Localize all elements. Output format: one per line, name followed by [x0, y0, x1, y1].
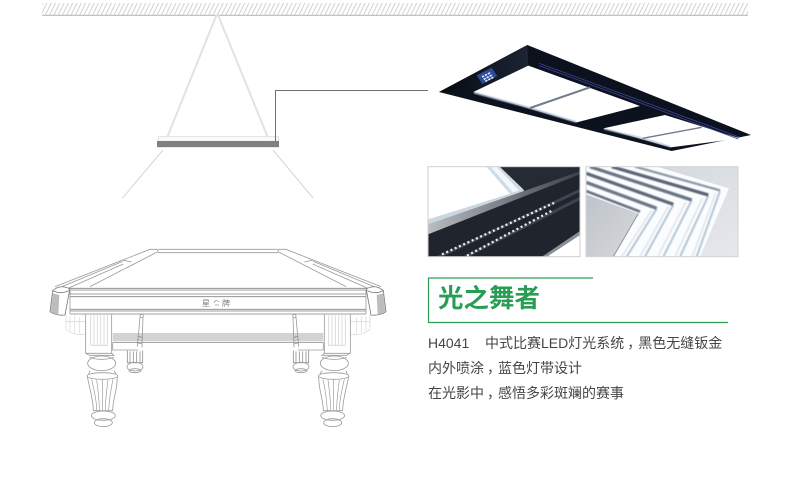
lamp window: right panel: [603, 115, 740, 147]
description text: 内外喷涂，蓝色灯带设计: [428, 360, 582, 376]
table right half: [218, 249, 386, 427]
table brand mark: 星: [202, 299, 210, 308]
description text: 中式比赛LED灯光系统，黑色无缝钣金: [485, 335, 722, 351]
lamp window: left panel: [473, 66, 640, 122]
title: 光之舞者: [438, 284, 540, 313]
detail photo: frame layers: [586, 167, 738, 257]
title frame: [428, 278, 728, 322]
detail photo: LED strip: [428, 167, 580, 259]
description text: 在光影中，感悟多彩斑斓的赛事: [428, 385, 624, 401]
table brand mark: [202, 298, 230, 308]
suspended lamp side view: [122, 15, 313, 198]
table brand mark: 牌: [222, 298, 230, 308]
lamp logo: [477, 68, 497, 84]
description text: H4041: [428, 335, 469, 351]
callout line: [276, 90, 428, 141]
description text: [428, 335, 722, 401]
ceiling hatching: [42, 3, 748, 16]
billiard table line drawing: [50, 249, 386, 427]
table left half: [50, 249, 218, 427]
lamp product image: [439, 45, 751, 151]
inner panel: [586, 194, 638, 257]
